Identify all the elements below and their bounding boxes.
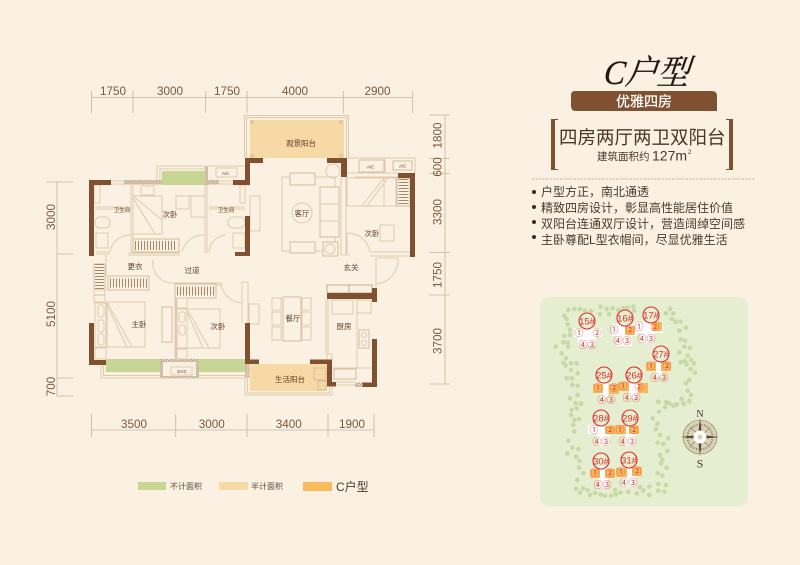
building 17#: ③ — [646, 334, 656, 344]
building 27#: ④ — [650, 373, 660, 383]
walls — [89, 158, 415, 387]
master bedroom furniture — [94, 290, 145, 359]
feature list — [532, 184, 745, 247]
room labels: 客厅 — [294, 208, 310, 218]
headline block: 127m — [652, 148, 687, 164]
subtitle bar — [571, 91, 717, 111]
dimensions: right: 1750 — [432, 262, 444, 288]
building 31#: ③ — [628, 478, 638, 488]
building 16#: ② — [625, 325, 635, 335]
compass — [681, 409, 719, 470]
building 31#: 31# — [621, 456, 638, 466]
building 15#: ① — [574, 328, 584, 338]
building 25#: ② — [609, 383, 619, 393]
east bedroom furniture — [347, 178, 410, 241]
building 17#: ④ — [637, 334, 647, 344]
south green balconies: 3A/C — [177, 369, 188, 374]
dining table — [249, 297, 311, 341]
building 29# — [615, 410, 639, 447]
north green balcony: A/C — [222, 171, 230, 176]
building 26#: ① — [618, 381, 628, 391]
dimensions: left: 3000 — [45, 204, 58, 230]
view balcony: 观景阳台 — [286, 138, 316, 148]
building 15#: ③ — [587, 340, 597, 350]
building 30#: 30# — [593, 456, 610, 468]
building 28#: ① — [589, 425, 599, 435]
view balcony — [244, 116, 348, 158]
building 27#: ② — [662, 361, 672, 371]
bathroom fixtures: 卫生间 — [114, 206, 130, 214]
building 28#: 28# — [593, 414, 610, 424]
dimensions: right — [429, 115, 450, 384]
dimensions: right: 3700 — [432, 328, 444, 354]
title: C户型 — [602, 55, 697, 92]
room labels: 玄关 — [344, 262, 359, 272]
room labels: 次卧 — [162, 209, 178, 219]
building 16#: 16# — [617, 314, 634, 324]
building 28#: ③ — [601, 437, 611, 447]
living balcony: 生活阳台 — [275, 374, 305, 384]
legend: 不计面积 — [170, 481, 202, 491]
south bedroom furniture — [162, 284, 220, 359]
living room furniture — [250, 164, 340, 256]
dimensions: top: 1750 — [100, 85, 126, 98]
dimensions: top: 4000 — [282, 85, 308, 98]
room labels: 厨房 — [336, 321, 352, 331]
legend: 半计面积 — [251, 481, 283, 491]
building 17#: ① — [634, 322, 644, 332]
building 27#: ① — [646, 361, 656, 371]
compass: N — [696, 409, 704, 420]
north east A/C units — [347, 158, 415, 177]
dimensions: right: 3300 — [432, 199, 444, 225]
building 16#: ③ — [622, 336, 632, 346]
site plan — [540, 297, 748, 506]
building 31# — [616, 452, 642, 488]
building 28#: ② — [605, 425, 615, 435]
north east A/C units: A/C — [367, 164, 375, 170]
building 15#: 15# — [579, 316, 596, 328]
building 30#: ① — [590, 468, 600, 478]
feature list: 精致四房设计，彰显高性能居住价值 — [541, 200, 733, 215]
building 29#: ② — [629, 425, 639, 435]
building 16#: ① — [609, 325, 619, 335]
feature list: 户型方正，南北通透 — [541, 184, 649, 199]
building 15#: ④ — [578, 340, 588, 350]
dimensions: bottom: 1900 — [339, 418, 365, 431]
dimensions: left — [45, 182, 73, 396]
room labels: 次卧 — [210, 321, 226, 331]
building 17# — [634, 307, 663, 344]
dimensions: bottom: 3000 — [199, 418, 225, 431]
building 31#: ① — [616, 467, 626, 477]
dimensions: left: 5100 — [45, 301, 58, 327]
building 29#: ③ — [627, 437, 637, 447]
building 26#: ④ — [622, 393, 632, 403]
building 26# — [618, 367, 648, 403]
dimensions: bottom: 3500 — [121, 418, 147, 431]
dimensions: top — [92, 85, 413, 113]
building 15# — [574, 313, 602, 350]
north green balcony — [111, 166, 245, 185]
room labels — [128, 208, 380, 331]
building 28# — [588, 410, 615, 447]
subtitle bar: 优雅四房 — [616, 94, 672, 110]
building 17#: 17# — [643, 310, 660, 322]
dimensions: top: 2900 — [364, 85, 391, 98]
inner partitions — [95, 177, 410, 360]
room labels: 更衣 — [128, 261, 143, 271]
room labels: 次卧 — [364, 228, 380, 238]
building 25#: ③ — [606, 395, 616, 405]
bathroom fixtures: 卫生间 — [218, 206, 234, 214]
feature list: 双阳台连通双厅设计，营造阔绰空间感 — [541, 216, 745, 231]
dimensions: bottom: 3400 — [276, 418, 302, 431]
building 29#: 29# — [622, 414, 639, 424]
room labels: 过道 — [184, 265, 200, 275]
building 16# — [609, 310, 637, 346]
building 29#: ① — [615, 425, 625, 435]
bathroom fixtures — [94, 185, 245, 248]
doors — [110, 233, 398, 303]
living balcony — [245, 364, 332, 395]
building 27#: ③ — [659, 373, 669, 383]
building 25#: 25# — [596, 370, 613, 382]
building 26#: ③ — [631, 393, 641, 403]
building 27#: 27# — [653, 350, 670, 360]
building 25# — [593, 367, 619, 405]
legend: C户型 — [336, 479, 369, 494]
compass: S — [697, 456, 703, 470]
building 27# — [646, 346, 672, 383]
building 29#: ④ — [618, 437, 628, 447]
north bedroom furniture — [133, 186, 205, 252]
dimensions: right: 1800 — [432, 122, 444, 149]
kitchen fixtures — [327, 285, 372, 387]
building 28#: ④ — [592, 437, 602, 447]
building 30# — [590, 453, 615, 490]
dimensions: left: 700 — [45, 376, 58, 396]
building 17#: ② — [650, 322, 660, 332]
building 25#: ④ — [597, 395, 607, 405]
headline block: 四房两厅两卫双阳台 — [559, 127, 726, 148]
headline block: 建筑面积约 — [597, 150, 650, 163]
trees — [553, 304, 697, 498]
north east A/C units: A/C — [399, 164, 407, 168]
feature list: 主卧尊配L型衣帽间，尽显优雅生活 — [541, 232, 728, 247]
dimensions: bottom — [92, 414, 374, 437]
room labels: 主卧 — [132, 319, 147, 329]
dimensions: top: 3000 — [157, 85, 183, 98]
building 30#: ② — [605, 468, 615, 478]
dimensions: right: 600 — [432, 157, 444, 177]
walk-in closet — [94, 264, 149, 295]
headline block: 2 — [688, 150, 692, 156]
building 31#: ② — [632, 466, 642, 476]
building 25#: ① — [593, 383, 603, 393]
building 26#: ② — [634, 382, 644, 392]
building 26#: 26# — [626, 370, 643, 382]
building 31#: ④ — [619, 478, 629, 488]
floor plan — [89, 116, 415, 395]
building 15#: ② — [592, 328, 602, 338]
building 30#: ③ — [602, 480, 612, 490]
building 30#: ④ — [593, 480, 603, 490]
headline block — [551, 119, 733, 170]
legend — [138, 479, 369, 494]
building 16#: ④ — [613, 336, 623, 346]
dimensions: top: 1750 — [214, 85, 240, 98]
room labels: 餐厅 — [286, 314, 301, 323]
south green balconies — [101, 359, 250, 378]
